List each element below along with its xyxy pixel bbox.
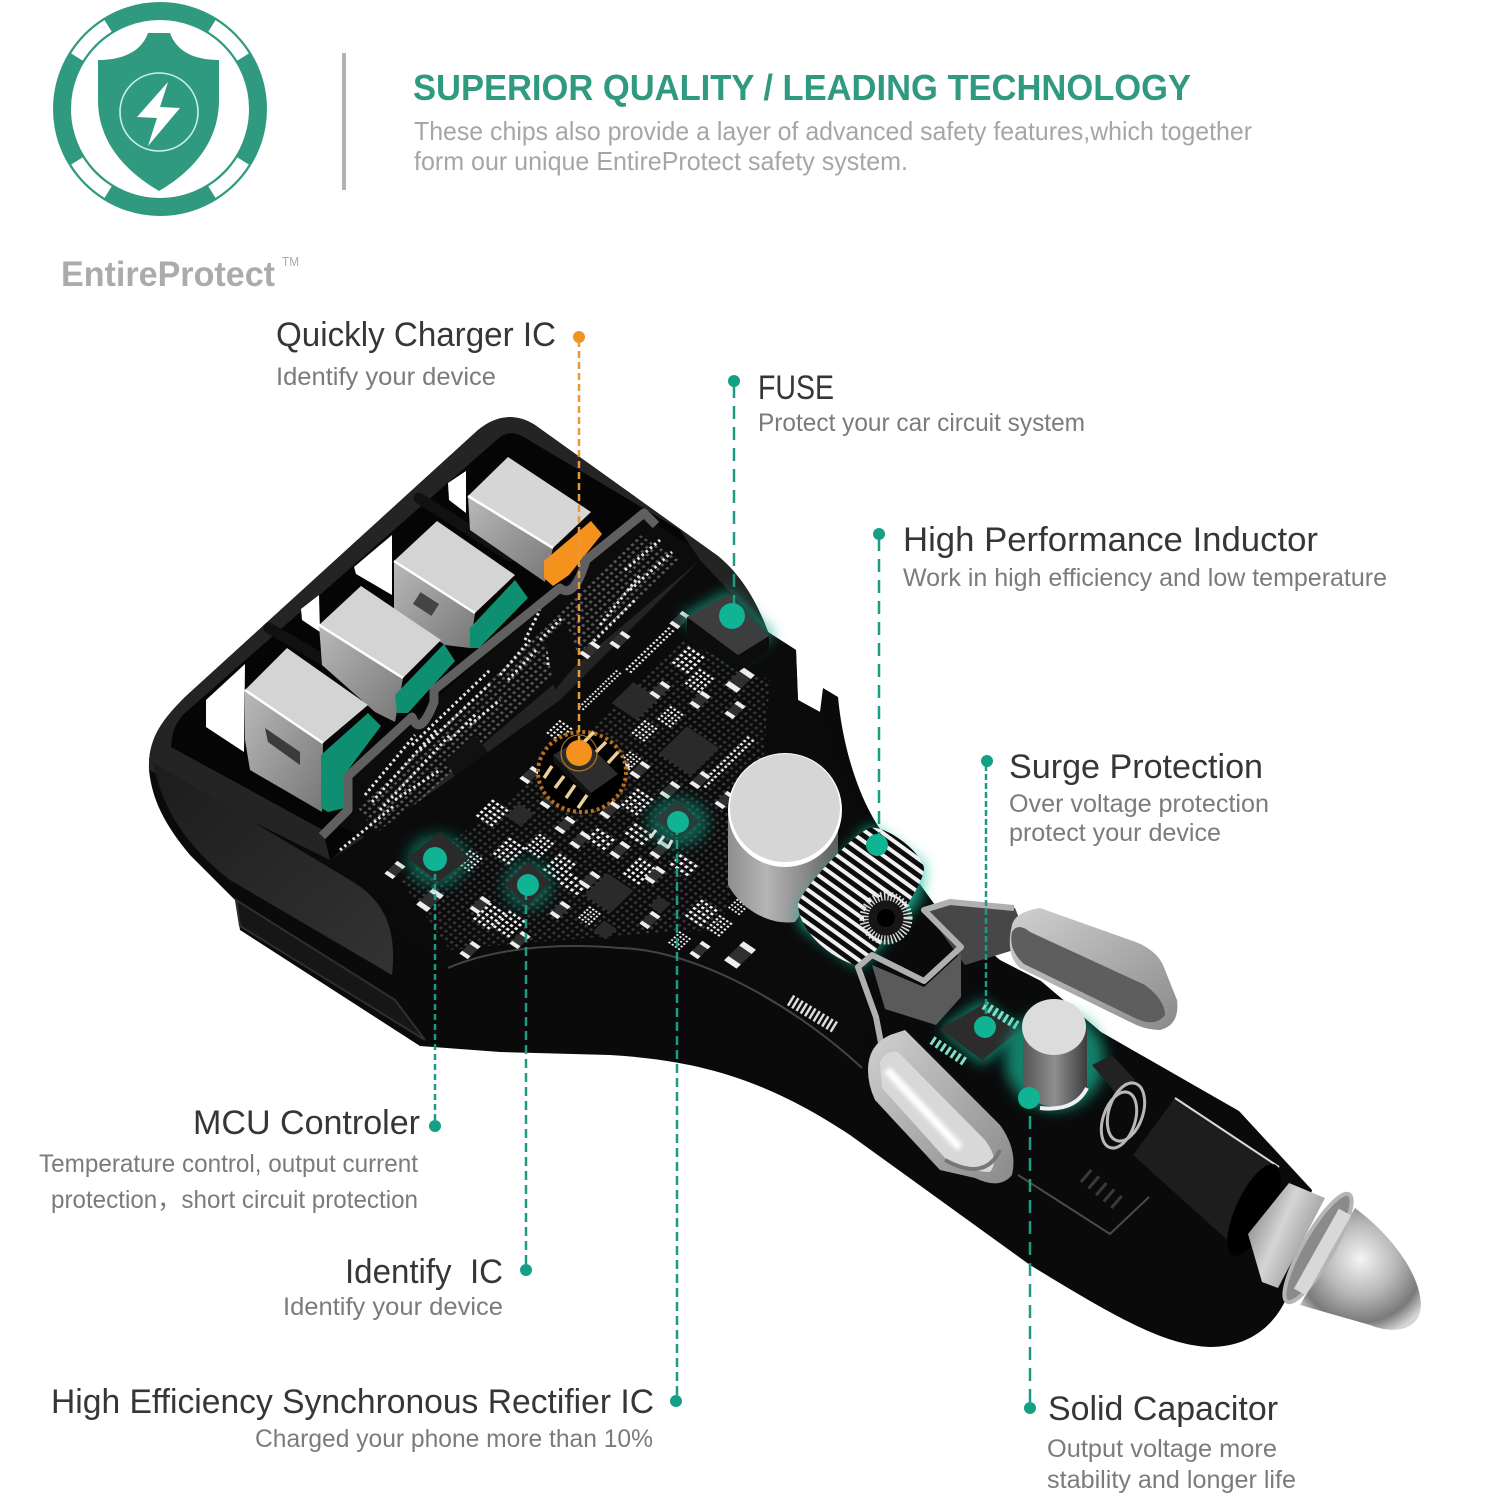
- usb port 3: [394, 521, 528, 648]
- components: [384, 611, 773, 969]
- subtitle: These chips also provide a layer of advanced safety features,which together: [414, 116, 1252, 146]
- vertical daughter board: [322, 513, 700, 850]
- callout: High Performance Inductor: Work in high efficiency and low temperature: [903, 564, 1387, 592]
- callout: Solid Capacitor: [1018, 1087, 1296, 1494]
- callout: FUSE: [719, 369, 1085, 629]
- callout: Solid Capacitor: Output voltage more: [1047, 1435, 1277, 1463]
- lower mounting clip: [236, 900, 425, 1040]
- large capacitor: [728, 753, 842, 923]
- callout: Solid Capacitor: stability and longer life: [1047, 1466, 1296, 1494]
- main circuit board: [335, 560, 875, 1068]
- logo ring: [62, 11, 258, 207]
- lower metal clip: [868, 1030, 1014, 1183]
- logo: EntireProtect shield badge: [62, 11, 258, 207]
- usb port 1: [245, 648, 381, 812]
- white windows: [206, 471, 466, 752]
- metal tip: [1248, 1183, 1421, 1330]
- callout: Surge Protection: Over voltage protection: [1009, 790, 1269, 818]
- callout: MCU Controler: MCU Controler: [193, 1104, 420, 1142]
- callout: MCU Controler: Temperature control, output current: [39, 1150, 418, 1178]
- upper metal clip: [1010, 908, 1177, 1030]
- callout: High Efficiency Synchronous Rectifier IC: High Efficiency Synchronous Rectifier IC: [51, 1383, 654, 1421]
- callout: Solid Capacitor: Solid Capacitor: [1048, 1390, 1278, 1428]
- inductor coil: [798, 825, 925, 968]
- callout: Surge Protection: [974, 748, 1269, 1038]
- callout: MCU Controler: [39, 847, 447, 1214]
- black rods between ports: [269, 498, 510, 682]
- car charger cutaway illustration: [149, 417, 1421, 1347]
- usb port 4: [468, 457, 591, 582]
- callout: Identify IC: [283, 874, 539, 1321]
- metal contact arm: [858, 902, 1030, 1048]
- usb port 2: [319, 586, 455, 722]
- surge protection chip: [932, 1000, 1022, 1065]
- identify chip: [504, 861, 552, 909]
- spring: [1095, 1078, 1151, 1153]
- small rear board: [1018, 1055, 1149, 1234]
- icon: shield: [98, 33, 219, 191]
- subtitle: form our unique EntireProtect safety system.: [414, 146, 908, 176]
- callout: Identify IC: Identify your device: [283, 1293, 503, 1321]
- callout: High Performance Inductor: [866, 521, 1387, 856]
- icon: lightning bolt: [137, 82, 180, 146]
- callout: High Performance Inductor: High Performance Inductor: [903, 521, 1318, 559]
- mcu chip: [407, 832, 470, 886]
- quick charger chip: [538, 732, 626, 812]
- callout: Surge Protection: protect your device: [1009, 819, 1221, 847]
- housing side wall: [153, 762, 393, 975]
- heading block: [413, 67, 1252, 176]
- title: SUPERIOR QUALITY / LEADING TECHNOLOGY: [413, 67, 1191, 108]
- subtitle: [414, 116, 1252, 176]
- callout: Identify IC: Identify IC: [345, 1253, 503, 1291]
- callout: High Efficiency Synchronous Rectifier IC: Charged your phone more than 10%: [255, 1425, 653, 1453]
- callout: High Efficiency Synchronous Rectifier IC: [51, 811, 689, 1453]
- callout: MCU Controler: protection，short circuit protection: [51, 1186, 418, 1214]
- black barrel: [1133, 1098, 1291, 1263]
- housing interior: [171, 433, 700, 860]
- callout: FUSE: FUSE: [758, 369, 834, 407]
- fuse component: [680, 590, 775, 672]
- callout: Quickly Charger IC: Identify your device: [276, 363, 496, 391]
- callout: Quickly Charger IC: [276, 316, 597, 771]
- charger body silhouette: [149, 417, 1312, 1347]
- lower board edge line: [448, 946, 862, 1068]
- icon: circle around bolt: [120, 73, 198, 151]
- rectifier chip: [648, 798, 708, 848]
- callout: Surge Protection: Surge Protection: [1009, 748, 1263, 786]
- orange quick charge block: [544, 521, 602, 586]
- callout: FUSE: Protect your car circuit system: [758, 409, 1085, 437]
- small capacitor: [1005, 999, 1105, 1110]
- housing top rim: [149, 417, 768, 860]
- brand name: EntireProtect: TM: [282, 254, 299, 269]
- callout: Quickly Charger IC: Quickly Charger IC: [276, 316, 556, 354]
- brand name: EntireProtect: EntireProtect: [61, 255, 275, 294]
- board texture: [400, 640, 770, 950]
